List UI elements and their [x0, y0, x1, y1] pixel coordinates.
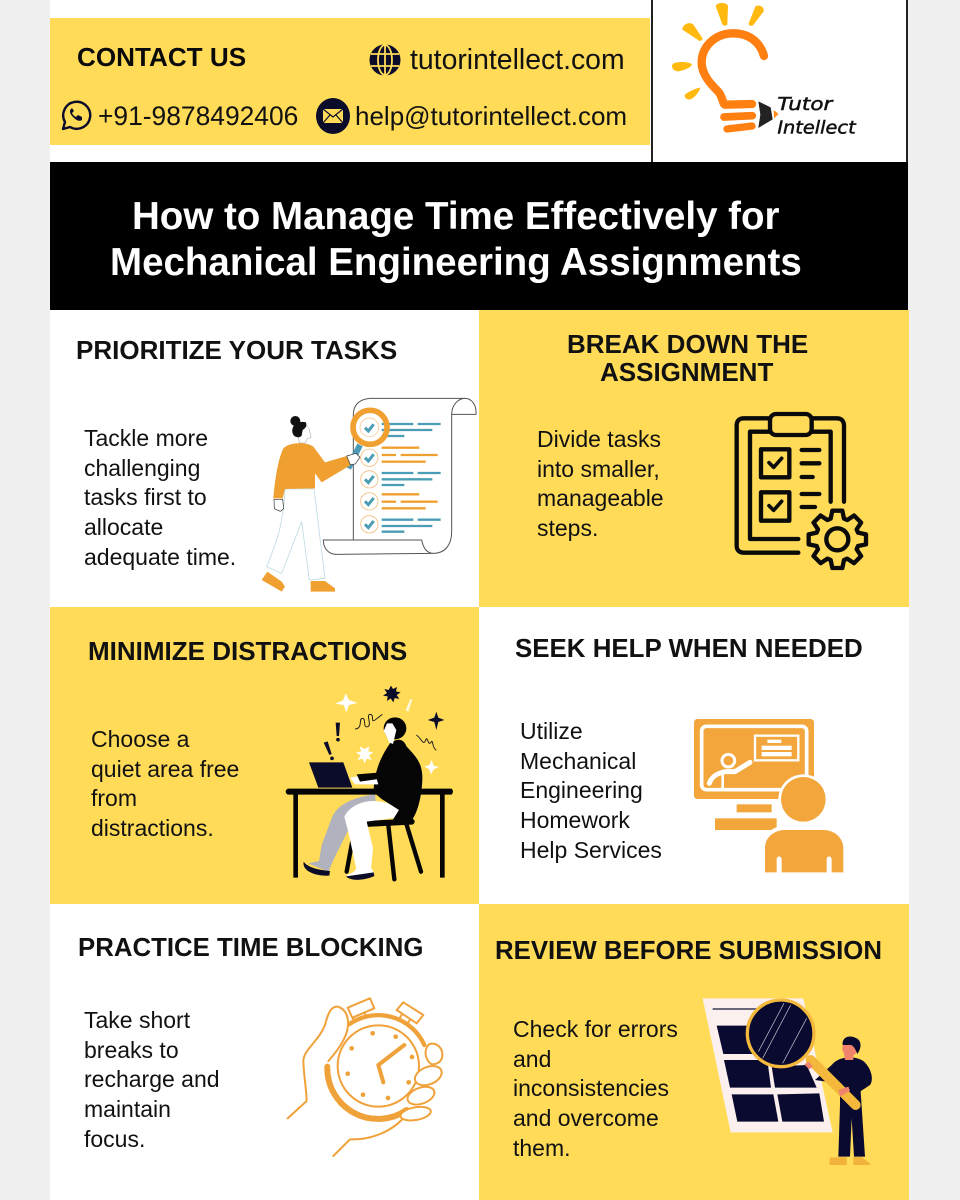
text block — [84, 1007, 220, 1152]
text block — [84, 425, 236, 570]
icon: mail — [316, 98, 350, 134]
text block: challenging — [84, 455, 200, 481]
text block: focus. — [84, 1126, 145, 1152]
icon: tutor intellect logo: Tutor — [777, 94, 834, 115]
text block: steps. — [537, 515, 598, 541]
text block: quiet area free — [91, 756, 239, 782]
heading: contact us: CONTACT US — [77, 42, 246, 72]
panel: prioritize your tasks — [50, 310, 480, 607]
text block: them. — [513, 1135, 571, 1161]
icon: hand holding stopwatch — [286, 997, 444, 1157]
panel: contact header — [50, 0, 652, 162]
text block: Divide tasks — [537, 426, 661, 452]
icon: person with magnifier and document — [702, 998, 872, 1165]
text block — [513, 1016, 678, 1161]
text block: adequate time. — [84, 544, 236, 570]
phone number: +91-9878492406 — [98, 101, 298, 131]
icon: globe — [370, 44, 400, 76]
text block: breaks to — [84, 1037, 179, 1063]
email: help@tutorintellect.com — [355, 101, 627, 131]
text block: Mechanical — [520, 748, 636, 774]
text block: Engineering — [520, 777, 643, 803]
text block: Help Services — [520, 837, 662, 863]
text block: manageable — [537, 485, 664, 511]
website: tutorintellect.com — [410, 44, 625, 76]
heading: ASSIGNMENT — [600, 356, 773, 386]
text block — [91, 726, 239, 841]
heading: BREAK DOWN THE — [567, 329, 808, 359]
title — [110, 195, 802, 284]
text block: distractions. — [91, 815, 214, 841]
icon: tutor intellect logo — [672, 3, 857, 138]
text block — [520, 718, 662, 863]
heading: REVIEW BEFORE SUBMISSION — [495, 937, 882, 965]
panel: minimize distractions — [50, 607, 480, 904]
text block: inconsistencies — [513, 1075, 669, 1101]
text block: Choose a — [91, 726, 189, 752]
contact band — [50, 18, 650, 145]
text block — [537, 426, 664, 541]
panel: break down the assignment — [479, 310, 909, 607]
text block: and — [513, 1046, 551, 1072]
heading: SEEK HELP WHEN NEEDED — [515, 635, 863, 663]
text block: allocate — [84, 514, 163, 540]
icon: whatsapp — [62, 100, 92, 130]
heading: MINIMIZE DISTRACTIONS — [88, 636, 407, 666]
panel: seek help when needed — [479, 607, 909, 904]
text block: Homework — [520, 807, 630, 833]
text block: Tackle more — [84, 425, 208, 451]
heading — [567, 329, 808, 386]
text block: tasks first to — [84, 484, 207, 510]
text block: Take short — [84, 1007, 190, 1033]
heading: PRACTICE TIME BLOCKING — [78, 934, 423, 962]
title banner — [50, 162, 908, 310]
text block: and overcome — [513, 1105, 659, 1131]
icon: woman with checklist — [262, 398, 477, 592]
text block: maintain — [84, 1096, 171, 1122]
title: How to Manage Time Effectively for — [132, 195, 780, 238]
icon: clipboard with gear — [734, 412, 868, 570]
title: Mechanical Engineering Assignments — [110, 241, 802, 284]
heading: PRIORITIZE YOUR TASKS — [76, 335, 397, 365]
text block: into smaller, — [537, 456, 660, 482]
icon: monitor with tutor and student — [694, 719, 844, 872]
icon: man distracted at desk — [286, 686, 454, 882]
panel: practice time blocking — [50, 904, 480, 1200]
text block: Check for errors — [513, 1016, 678, 1042]
text block: Utilize — [520, 718, 583, 744]
panel: logo — [651, 0, 908, 162]
panel: review before submission — [479, 904, 909, 1200]
text block: from — [91, 785, 137, 811]
text block: recharge and — [84, 1066, 220, 1092]
icon: tutor intellect logo: Intellect — [777, 117, 857, 138]
